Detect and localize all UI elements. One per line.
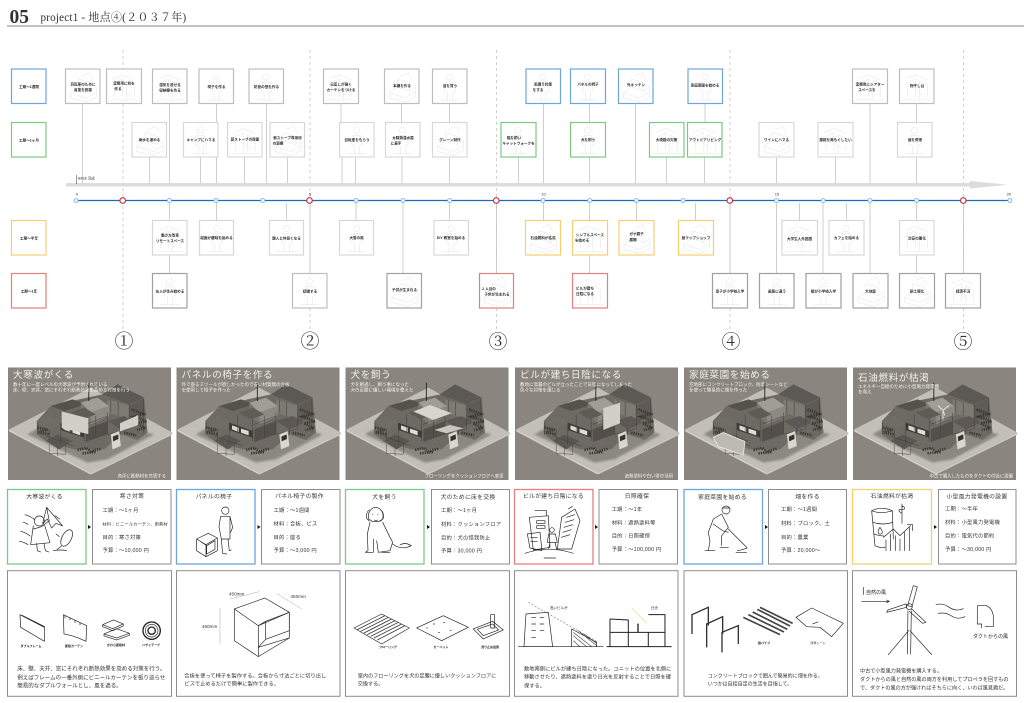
timeline row: half year: 大学生人外国語 (787, 236, 812, 241)
panel: ビルが建ち日陰になる render: 敷地に高層のビルが立ったことで日陰になってしまった (520, 381, 632, 388)
timeline row: one year: 耐土壌化 (910, 288, 925, 294)
detail panel: 断熱対策 (8, 571, 172, 696)
timeline row: one week: 収納棚を作る (159, 88, 181, 92)
panel: 石油燃料が枯渇 render: 中古で購入したものをダクトの付近に設置 (930, 472, 1014, 480)
timeline row: one month: アウトドアリビング (689, 137, 722, 142)
card text: 小型風力発電機の設置: 材料：小型風力発電機 (945, 518, 1000, 526)
panel: パネルの椅子を作る render: パネルの椅子を作る (182, 369, 273, 381)
grey time arrow: BASE 完成 (78, 176, 95, 180)
timeline row: one week: 倉庫を設置 (74, 87, 92, 92)
card text: 日照確保: 日照確保 (625, 492, 649, 500)
legend: construction period: 工期～1週間 (19, 84, 39, 89)
detail panel: 椅子の図面: 450mm (229, 592, 244, 596)
card: 大寒波がくる: 大寒波がくる (26, 492, 63, 500)
card: 家庭菜園を始める: 家庭菜園を始める (698, 493, 747, 501)
detail panel: クッションフロア: フローリング (379, 644, 397, 649)
milestone numbers: ⑤ (953, 327, 973, 354)
detail panel: 日陰対策: 日光 (651, 605, 658, 610)
timeline row: half year: リモートスペース (156, 238, 185, 243)
detail panel: 畑: 防草シート (810, 640, 826, 645)
legend: construction period: 工期～1年 (21, 288, 38, 294)
timeline row: one year: 子供が生まれる (392, 287, 417, 292)
card text: 寒さ対策: 工期：～1ヶ月 (102, 507, 139, 514)
timeline row: half year: を始める (575, 238, 590, 242)
panel: 石油燃料が枯渇 render: エネルギー自給のために小型風力発電機 (858, 383, 939, 390)
legend: construction period: 工期～1ヶ月 (19, 138, 39, 142)
card: パネルの椅子: パネルの椅子 (196, 492, 232, 500)
timeline row: one year: 経済不況 (956, 288, 971, 294)
card text: 日照確保 (599, 490, 678, 564)
timeline row: one week (66, 69, 934, 104)
timeline row: half year: 庭ラップショップ (682, 235, 711, 240)
timeline row: one month: 太陽熱温水器 (392, 135, 414, 140)
card text: 日照確保: 材料：遮熱塗料等 (612, 518, 656, 526)
card text: 日照確保: 予算：～100,000 円 (612, 545, 661, 553)
card: 石油燃料が枯渇 (852, 490, 932, 564)
timeline row: one week: 作る (114, 86, 122, 91)
detail panel: クッションフロア (346, 571, 510, 696)
panel: パネルの椅子を作る render (176, 368, 341, 480)
blue year axis: 0 (76, 192, 79, 196)
panel: 犬を飼う render: 犬の足腰に優しい環境を整えた (350, 386, 414, 394)
page title: project1 - 地点④(２０３７年) (40, 10, 187, 24)
timeline row: half year: 大雪の風 (349, 235, 364, 240)
panel: 家庭菜園を始める render (684, 368, 848, 480)
detail panel: クッションフロア: 交換する。 (358, 679, 383, 687)
card text: パネル椅子の製作: 材料：合板、ビス (274, 520, 317, 528)
card text: パネル椅子の製作: 予算：～3,000 円 (274, 546, 317, 554)
timeline row: one week: 物干し台 (910, 83, 925, 88)
card text: 畑を作る (768, 490, 846, 564)
connector lines (82, 103, 964, 273)
panel: 犬を飼う render (346, 368, 510, 480)
milestone numbers: ④ (721, 327, 741, 354)
timeline row: one week: 雨漏り対策 (534, 82, 552, 86)
timeline row: one week: 防音の壁を作る (254, 84, 279, 89)
milestone numbers: ③ (488, 327, 508, 354)
timeline row: one year: 子供が生まれる (484, 292, 510, 296)
timeline row: one month: 薪ストーブの設置 (231, 136, 260, 142)
timeline row: one month: 雨水を溜める (139, 137, 161, 142)
timeline row: half year: 石油燃料が枯渇 (530, 235, 556, 240)
detail panel: 断熱対策: かわら断熱材 (107, 642, 125, 647)
detail panel: 風力発電 (852, 571, 1016, 696)
blue year axis: 15 (775, 192, 780, 196)
card text: 日照確保: 工期：～1年 (612, 505, 643, 513)
legend: construction period: 工期～半年 (20, 236, 38, 240)
card: 家庭菜園を始める (684, 490, 762, 564)
card text: パネル椅子の製作: パネル椅子の製作 (275, 492, 324, 500)
card text: 犬のために床を交換: 犬のために床を交換 (441, 493, 495, 501)
timeline row: one week: カーテンをつける (327, 87, 356, 92)
timeline row: half year (152, 220, 934, 255)
card: 犬を飼う: 犬を飼う (372, 493, 397, 501)
card: ビルが建ち日陰になる (514, 490, 593, 564)
panel: 犬を飼う render: フローリングをクッションフロアへ変更 (425, 472, 504, 480)
timeline row: half year: 展開 (629, 237, 637, 242)
timeline row: one month: 庭を修復 (908, 137, 923, 142)
timeline row: half year: カフェを始める (834, 235, 859, 240)
detail panel: 畑: いつかは自給自足の生活を目指して。 (708, 680, 792, 688)
panel: パネルの椅子を作る render: 外で座るスツールが欲しかったので安い材質無の合板 (182, 381, 290, 388)
blue year axis: 10 (541, 192, 546, 196)
panel: 大寒波がくる render: 数十年に一度レベルの大寒波が予想されている (13, 381, 107, 388)
card: ビルが建ち日陰になる: ビルが建ち日陰になる (523, 492, 584, 500)
milestone numbers (114, 326, 973, 354)
detail panel: 風力発電: 中古で小型風力発電機を購入する。 (860, 667, 942, 675)
detail panel: 椅子の図面 (176, 571, 340, 696)
timeline row: one week: 実務用にシアター (856, 82, 885, 86)
detail panel: 日陰対策: 高いビルが (550, 605, 568, 610)
card text: 小型風力発電機の設置 (938, 490, 1016, 564)
timeline row: one month: グレーン制作 (439, 137, 461, 142)
panel: 大寒波がくる render: 各所に断熱材を充填する (118, 472, 166, 480)
panel: 石油燃料が枯渇 render: を導入 (858, 388, 872, 396)
detail panel: 風力発電: で、ダクトの風の方が強ければそちらに向く、いわば風見鶏だ。 (860, 684, 1008, 692)
card text: 寒さ対策 (92, 490, 171, 564)
card: 犬を飼う (346, 490, 424, 564)
panel: ビルが建ち日陰になる render (515, 368, 679, 480)
card text: 寒さ対策: 寒さ対策 (120, 492, 144, 500)
detail panel: 断熱対策: 断熱カーテン (65, 643, 83, 648)
detail panel: 風力発電: ダクトからの風 (973, 633, 1008, 640)
panel: ビルが建ち日陰になる render: 色々な対策を講じる (520, 386, 560, 394)
timeline row: one month: キャンプにハマる (187, 137, 216, 142)
dashed milestone guides (123, 50, 964, 330)
panel: 大寒波がくる render (8, 368, 172, 480)
timeline row: one month: ワインにハマる (764, 137, 789, 142)
blue year axis: 5 (309, 192, 312, 196)
card text: 小型風力発電機の設置: 予算：～30,000 円 (945, 545, 992, 553)
timeline row: one week: 本棚を作る (393, 83, 411, 88)
card text: パネル椅子の製作: 工期：～1週間 (274, 506, 310, 514)
detail panel: 風力発電: 自然の風 (866, 589, 886, 596)
timeline row: one month: 猫を飼い (507, 135, 522, 140)
panel: 石油燃料が枯渇 render: 石油燃料が枯渇 (858, 372, 929, 384)
card text: 寒さ対策: 材料：ビニールカーテン、断熱材 (102, 520, 168, 528)
panel: 家庭菜園を始める render: 空地部にコンクリートブロック、防草シートなど (689, 381, 788, 388)
timeline row: one week: パネルの椅子 (577, 82, 599, 86)
detail panel: 椅子の図面: 450mm (290, 594, 306, 599)
card text: 畑を作る: 予算：20,000～ (781, 546, 821, 554)
card text: 畑を作る: 目的：農業 (781, 533, 809, 541)
card text: 寒さ対策: 予算：～10,000 円 (102, 546, 149, 554)
card text: 畑を作る: 材料：ブロック、土 (781, 519, 830, 527)
legend: construction period (12, 69, 46, 308)
card text: 犬のために床を交換: 予算：30,000 円 (441, 546, 482, 554)
timeline row: one year: ビルが建ち (576, 286, 594, 290)
card text: 犬のために床を交換 (432, 490, 510, 564)
timeline row: one year: 2 人目の (482, 286, 496, 291)
detail panel: 断熱対策: 例えばフレームの一番外側にビニールカーテンを張り巡らせ (17, 673, 166, 681)
blue year axis: 20 (1007, 192, 1012, 196)
timeline row: one year: 友人が住み始める (156, 288, 185, 294)
timeline row: one month: 大規模の対策 (656, 137, 678, 142)
card: パネルの椅子 (176, 490, 255, 564)
timeline row: one week: スペースを (858, 87, 876, 92)
timeline row: one week: 椅子を作る (208, 84, 226, 89)
timeline row: half year: シンプルスペース (576, 232, 605, 237)
panel: ビルが建ち日陰になる render: 遮熱塗料や白い壁の活用 (625, 472, 673, 480)
timeline row: half year: ガヤ親子 (629, 231, 644, 236)
timeline row: one year (152, 274, 980, 308)
card text: パネル椅子の製作 (262, 490, 340, 564)
timeline row: half year: 親人と仲良くなる (272, 236, 301, 240)
timeline row: one year: 大地震 (865, 288, 876, 294)
timeline row: one year: 結婚する (303, 288, 318, 294)
card text: パネル椅子の製作: 目的：座る (274, 533, 301, 541)
card text: 小型風力発電機の設置: 工期：～半年 (945, 504, 978, 512)
detail panel: 椅子の図面: 450mm (202, 624, 217, 629)
milestone numbers: ② (300, 326, 320, 354)
panel: 大寒波がくる render: 床、壁、天井、窓にそれぞれ断熱効果を高める対策を行う (13, 386, 130, 394)
timeline row: half year: 絵画が趣味を始める (200, 235, 233, 240)
timeline row: one week: 苗を買う (443, 83, 457, 88)
blue year axis (74, 192, 1012, 203)
detail panel: 断熱対策: 床、壁、天井、窓にそれぞれ断熱効果を高める対策を行う。 (17, 665, 165, 673)
timeline row: one week: をする (533, 87, 544, 92)
detail panel: 風力発電: ダクトからの風と自然の風の両方を利用してプロペラを回すもの (860, 675, 1008, 683)
timeline row: one year: 娘が小学校入学 (811, 288, 836, 294)
timeline row: one month: 犬を飼う (581, 137, 595, 142)
timeline row: one month: 自転車をもらう (344, 137, 370, 142)
detail panel: 断熱対策: 簡易的なダブルウォールとし、風を遮る。 (17, 681, 122, 689)
panel: 家庭菜園を始める render: 家庭菜園を始める (689, 369, 771, 381)
card text: 小型風力発電機の設置: 小型風力発電機の設置 (947, 492, 1007, 500)
detail panel: 断熱対策: ハサミテープ (142, 642, 160, 647)
detail panel: クッションフロア: 滑り止め設置 (481, 644, 499, 649)
detail panel: 日陰対策: 敷地南側にビルが建ち日陰になった。ユニットの位置を北側に (524, 665, 671, 673)
arrows between cards (88, 525, 937, 529)
card text: 犬のために床を交換: 材料：クッションフロア (441, 520, 501, 528)
panel: 犬を飼う render: 犬を飼う (350, 369, 391, 381)
card: 石油燃料が枯渇: 石油燃料が枯渇 (871, 492, 913, 500)
timeline row: one month (132, 122, 932, 157)
timeline row: one month: に着手 (391, 140, 402, 146)
detail panel: 日陰対策: 保する。 (524, 681, 545, 689)
timeline row: half year: DIY 教室を始める (437, 235, 466, 240)
panel: 家庭菜園を始める render: を使って簡易的に畑を作った (689, 386, 748, 394)
detail panel: 畑: コンクリートブロックで囲んで簡易的に畑を作る。 (708, 672, 823, 680)
milestone numbers: ① (114, 326, 134, 354)
timeline row: one week: 実務用に机を (113, 80, 135, 86)
timeline row: one month: の薪棚 (273, 140, 284, 146)
card text: 犬のために床を交換: 目的：犬の怪我防止 (441, 534, 491, 542)
detail panel: 椅子の図面: 合板を使って椅子を製作する。合板から寸法ごとに切り出し (184, 672, 326, 680)
detail panel: 椅子の図面: ビスで止めるだけで簡単に製作できる。 (184, 679, 279, 687)
timeline row: one month: 薪ストーブ専用用 (273, 135, 302, 140)
timeline row: one month: 屋根を再もぐしたい (819, 137, 852, 142)
panel: パネルの椅子を作る render: を使用して椅子を作った (182, 386, 231, 394)
timeline row: half year: 働き方改革 (161, 232, 179, 238)
detail panel: 畑 (684, 571, 848, 696)
timeline row: one week: 湿気を逃せる (159, 82, 181, 87)
detail panel: 断熱対策: ダブルフレーム (21, 643, 41, 648)
timeline row: one week: 自転車のために (70, 82, 96, 86)
timeline row: one year: 日陰になる (576, 291, 594, 296)
panel: 石油燃料が枯渇 render (853, 368, 1017, 480)
timeline row: one year: 歯医に通う (768, 288, 786, 294)
panel: 犬を飼う render: 犬を飼過し、飼う事になった (350, 381, 409, 388)
detail panel: クッションフロア: カーペット (433, 644, 449, 649)
panel: ビルが建ち日陰になる render: ビルが建ち日陰になる (520, 369, 622, 381)
card text: 畑を作る: 畑を作る (795, 492, 820, 500)
detail panel: 畑: 鉄パイプ (758, 640, 770, 645)
panel: 大寒波がくる render: 大寒波がくる (13, 369, 74, 381)
page title (10, 7, 187, 28)
card text: 寒さ対策: 目的：寒さ対策 (102, 533, 141, 541)
detail panel: 日陰対策 (514, 571, 678, 696)
detail panel: クッションフロア: 室内のフローリングを犬の足腰に優しいクッションフロアに (358, 671, 496, 679)
timeline row: half year: 治安の悪化 (908, 236, 926, 240)
card text: 畑を作る: 工期：～1週間 (781, 505, 817, 513)
timeline row: one week: 家庭菜園を始める (691, 82, 720, 88)
timeline row: one week: 日差しが強く (330, 82, 352, 86)
timeline row: one month: キャットウォークを (502, 140, 535, 146)
card: 大寒波がくる (8, 490, 86, 564)
grey time arrow (66, 175, 1008, 188)
timeline row: one week: 外キッチン (627, 82, 645, 87)
card text: 日照確保: 目的：日照確保 (612, 532, 651, 540)
card text: 小型風力発電機の設置: 目的：電気代の節約 (945, 532, 994, 540)
timeline row: one year: 息子が小学校入学 (716, 288, 745, 294)
page title: 05 (10, 7, 29, 28)
detail panel: 日陰対策: 移動させたり、遮熱塗料を塗り日光を反射することで日照を確 (524, 673, 672, 681)
card text: 犬のために床を交換: 工期：～1ヶ月 (441, 507, 477, 514)
